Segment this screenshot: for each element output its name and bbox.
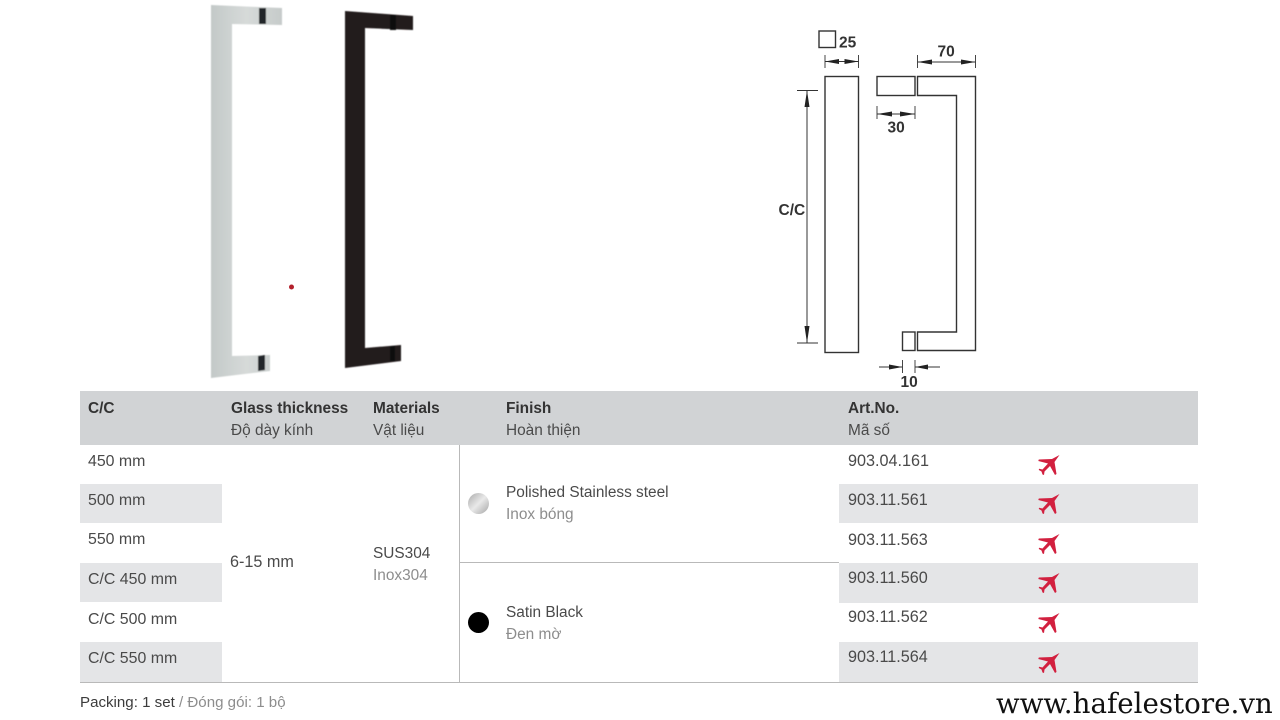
article numbers column: 903.11.561 (848, 491, 928, 509)
red dot (289, 284, 294, 290)
black handle (345, 11, 413, 368)
zebra row: left C/C 450 mm (80, 563, 222, 602)
finish text: satin black: Đen mờ (506, 626, 561, 643)
technical drawing with dimensions (778, 30, 976, 390)
column heading: finish: Finish (506, 400, 551, 417)
article numbers column: 903.11.562 (848, 608, 928, 626)
column heading: materials: Vật liệu (373, 422, 424, 439)
column heading: glass thickness: Độ dày kính (231, 422, 313, 439)
C/C values column: 550 mm (88, 531, 145, 548)
product photos: door pull handles (210, 4, 414, 378)
column heading: finish (506, 400, 580, 439)
material value: Inox304 (373, 567, 428, 584)
C/C values column: C/C 500 mm (88, 611, 177, 628)
material value (373, 545, 430, 584)
glass thickness value: 6-15 mm (230, 553, 294, 571)
side view (877, 76, 976, 350)
article numbers column (848, 452, 929, 666)
finish text: satin black (506, 604, 583, 643)
column heading: art no: Mã số (848, 422, 890, 439)
material value: SUS304 (373, 545, 430, 562)
article numbers column: 903.11.564 (848, 648, 928, 666)
website watermark: www.hafelestore.vn (996, 687, 1273, 720)
C/C values column: C/C 450 mm (88, 571, 177, 588)
C/C dimension (778, 90, 818, 343)
finish swatch: polished stainless (468, 493, 489, 514)
column heading: glass thickness: Glass thickness (231, 400, 348, 417)
label 25: 25 (839, 34, 857, 52)
C/C dimension: C/C (778, 202, 805, 219)
dimension 10 (879, 360, 940, 391)
finish text: polished stainless: Polished Stainless steel (506, 484, 669, 501)
column heading: materials (373, 400, 440, 439)
front view (819, 31, 858, 352)
dimension 70: 70 (938, 44, 955, 60)
C/C values column: 450 mm (88, 453, 145, 470)
zebra row: right 903.11.564 (839, 642, 1198, 682)
dimension 30: 30 (888, 120, 905, 136)
article numbers column: 903.11.560 (848, 568, 928, 586)
zebra row: left 500 mm (80, 484, 222, 523)
finish text: polished stainless: Inox bóng (506, 506, 574, 523)
column heading: art no (848, 400, 899, 439)
zebra row: right 903.11.561 (839, 484, 1198, 523)
finish text: satin black: Satin Black (506, 604, 583, 621)
packing note: Packing: 1 set / Đóng gói: 1 bộ (80, 694, 286, 711)
C/C values column (88, 453, 177, 667)
column heading: finish: Hoàn thiện (506, 422, 580, 439)
finish swatch: satin black (468, 612, 489, 633)
dimension 30 (877, 106, 915, 136)
article numbers column: 903.04.161 (848, 452, 929, 470)
silver handle (211, 5, 282, 378)
column heading: materials: Materials (373, 400, 440, 417)
zebra row: right 903.11.560 (839, 563, 1198, 602)
dimension 70 (918, 44, 976, 68)
table header band (80, 391, 1198, 444)
article numbers column: 903.11.563 (848, 531, 928, 549)
zebra row: left C/C 550 mm (80, 642, 222, 682)
column heading: C/C: C/C (88, 400, 115, 417)
column heading: glass thickness (231, 400, 348, 439)
C/C values column: 500 mm (88, 492, 145, 509)
column heading: art no: Art.No. (848, 400, 899, 417)
air-freight icons column (1038, 455, 1060, 673)
finish text: polished stainless (506, 484, 669, 523)
C/C values column: C/C 550 mm (88, 650, 177, 667)
